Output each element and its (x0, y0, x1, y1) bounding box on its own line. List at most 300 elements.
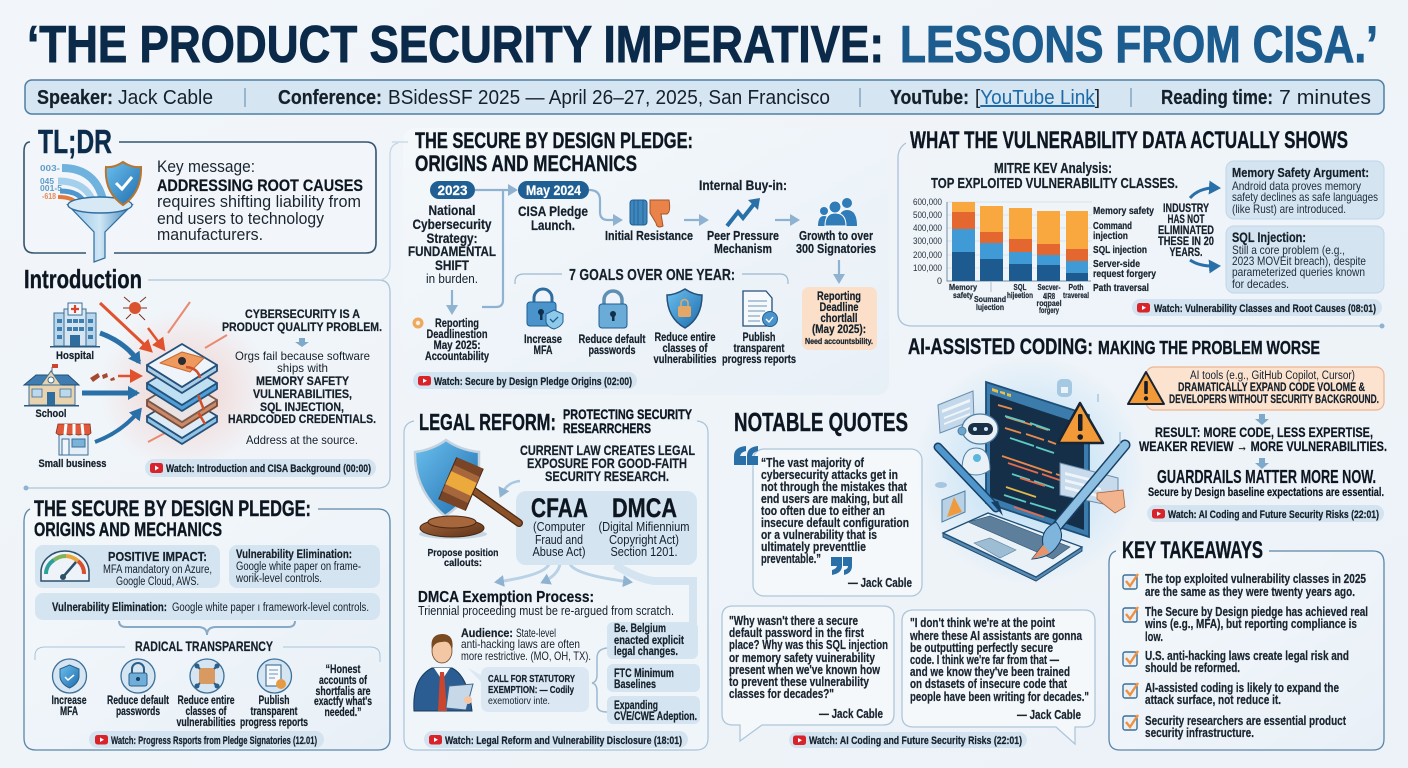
chart title: TOP EXPLOITED VULNERABILITY CLASSES. (931, 175, 1178, 192)
text: takeaway 4: attack surface, not reduce it. (1145, 693, 1281, 707)
box: FTC: Baselines (614, 677, 656, 691)
text: product quality problem: Orgs fail because software (235, 349, 370, 363)
group: radical transparency: MFA (60, 706, 78, 718)
callout: statutory exemption: EXEMPTION: — Codily (488, 684, 574, 696)
quote 3: — Jack Cable (1017, 707, 1081, 722)
panel: legal reform (404, 406, 708, 750)
box: FTC (607, 664, 700, 692)
panel: introduction (24, 143, 398, 490)
label: signatories: 300 Signatories (796, 242, 876, 256)
timeline: 2023: National (428, 203, 476, 218)
lock badge (1057, 379, 1072, 397)
icon: open quote (734, 446, 758, 465)
watch link: AI coding quotes: Watch: AI Coding and Future Security Risks (22:01) (809, 735, 1022, 747)
text: product quality problem: CYBERSECURITY IS A (245, 307, 360, 321)
bar: path traversal (1066, 211, 1088, 281)
timeline: May 2024: Launch. (531, 217, 575, 233)
stacked bar chart: safety (953, 290, 973, 300)
timeline: 2023: Cybersecurity (412, 217, 492, 232)
box: memory safety argument (1226, 161, 1384, 219)
icon: signatories (818, 198, 857, 226)
heading: pledge origins: ORIGINS AND MECHANICS (415, 151, 637, 176)
stacked bar chart: Poth (1068, 282, 1084, 292)
quote 1 (734, 446, 922, 596)
group: radical transparency: Publish (258, 695, 290, 707)
text: current law: EXPOSURE FOR GOOD-FAITH (527, 455, 687, 471)
group: seven goals (515, 267, 796, 366)
timeline: reporting deadline: Deadlinestion (426, 329, 488, 341)
text: product quality problem: MEMORY SAFETY (256, 374, 349, 388)
timeline connectors (452, 190, 839, 312)
box: positive impact: MFA mandatory on Azure, (103, 564, 212, 576)
heading: legal reform: RESEARRCHERS (563, 420, 651, 436)
watch link: introduction (145, 459, 376, 477)
watch link: progress reports: Watch: Progress Rsports from Pledge Signatories (12.01) (111, 735, 317, 747)
icon: shield with lock (667, 289, 702, 328)
info bar: Jack Cable (118, 87, 213, 109)
box: CFAA and DMCA: (Digital Mifiennium (598, 519, 690, 534)
text: result (1139, 424, 1387, 454)
chart legend: injection (1093, 230, 1128, 242)
callout: statutory exemption: exemotiorv inte. (488, 695, 550, 707)
heading: AI-assisted coding (908, 334, 1320, 359)
illustration: laptop with AI robot and warning (915, 355, 1145, 585)
group: seven goals: Reduce default (578, 334, 646, 346)
icon: software layers (147, 344, 217, 444)
quote 3: people have been writing for decades." (910, 689, 1089, 704)
text: takeaway 5: Security researchers are essential product (1145, 714, 1347, 728)
stacked bar chart: 300,000 (913, 236, 942, 247)
text: takeaway 3: U.S. anti-hacking laws create legal risk and (1145, 649, 1349, 663)
box: Belgium (607, 621, 698, 659)
quote 1: or a vulnerability that is (761, 527, 877, 542)
stacked bar chart: Secver- (1038, 282, 1061, 292)
quote 2: present when we've known how (729, 662, 881, 677)
timeline: 2023: Strategy: (426, 231, 478, 246)
chart legend: SQL injection (1093, 244, 1147, 256)
icon: code funnel and shield: 001-5 (40, 184, 63, 193)
quote 1: “The vast majority of (761, 455, 865, 470)
panel: pledge impact (24, 496, 390, 750)
text: product quality problem: HARDCODED CREDENTIALS. (228, 412, 376, 426)
callout: AI tools warning (1128, 367, 1384, 410)
timeline: reporting deadline: May 2025: (434, 340, 480, 352)
info bar: BSidesSF 2025 — April 26–27, 2025, San Francisco (388, 87, 830, 109)
stacked bar chart: forgery (1039, 305, 1059, 315)
stacked bar chart: 600,000 (913, 197, 942, 208)
text: takeaway 4 (1145, 681, 1339, 707)
heading: legal reform: PROTECTING SECURITY (563, 406, 693, 422)
quote 3: "I don't think we're at the point (910, 615, 1056, 630)
text: takeaway 3: should be reformed. (1145, 661, 1240, 675)
icon: down arrow (1255, 458, 1269, 469)
watch link: vulnerability classes (1132, 299, 1382, 316)
box: Belgium: enacted explicit (614, 633, 684, 647)
text: takeaway 5 (1145, 714, 1347, 740)
group: radical transparency: RADICAL TRANSPARENCY (135, 638, 273, 654)
text: product quality problem: ships with (277, 361, 328, 375)
timeline: May 2024 (518, 181, 589, 233)
text: product quality problem: PRODUCT QUALITY PROBLEM. (222, 320, 382, 334)
quote 2: or memory safety vuinerability (729, 650, 876, 665)
group: radical transparency: passwords (116, 706, 160, 718)
callout: statutory exemption: CALL FOR STATUTORY (488, 673, 575, 685)
stacked bar chart: 500,000 (913, 210, 942, 221)
group: seven goals: Publish (742, 332, 776, 344)
checkbox: takeaway 4 (1123, 683, 1138, 698)
timeline: May 2024: May 2024 (526, 182, 581, 198)
box: SQL injection: Still a core problem (e.g., (1232, 243, 1345, 257)
timeline: 2023: 2023 (438, 182, 468, 198)
text: audience: anti-hacking laws are often (461, 637, 580, 651)
box: CVE/CWE: CVE/CWE Adeption. (614, 709, 697, 723)
label: peer pressure: Mechanism (714, 242, 772, 256)
checkbox: takeaway 5 (1123, 715, 1138, 730)
text: product quality problem: SQL INJECTION, (260, 400, 344, 414)
card right with hand (1060, 463, 1118, 507)
label: school: School (36, 408, 66, 420)
timeline: 2023 (408, 181, 496, 286)
text: key message: Key message: (157, 157, 255, 176)
stacked bar chart: lujection (976, 302, 1004, 312)
info bar: Conference: (278, 87, 382, 109)
text: current law: CURRENT LAW CREATES LEGAL (520, 442, 695, 458)
stacked bar chart (913, 197, 1156, 315)
box: vulnerability elimination: Google white paper on frame- (236, 561, 361, 573)
text: current law: SECURITY RESEARCH. (545, 468, 669, 484)
panel: notable quotes (722, 407, 1095, 748)
text: takeaway 1: are the same as they were twenty years ago. (1145, 585, 1355, 599)
callout: reporting shortfall: Need accountsbility. (805, 336, 873, 346)
group: radical transparency: shortfalis are (316, 686, 370, 698)
callout: industry has not eliminated: THESE IN 20 (1158, 234, 1214, 248)
quote 3: where these AI assistants are gonna (909, 628, 1083, 643)
group: radical transparency: Reduce default (107, 695, 169, 707)
watch link: progress reports (89, 731, 324, 748)
watch link: AI coding (1147, 505, 1384, 522)
box: vulnerability elimination (229, 545, 380, 588)
watch link: pledge origins: Watch: Secure by Design Pledge Origins (02:00) (434, 376, 632, 388)
box: FTC: FTC Minimum (614, 666, 674, 680)
chart title (931, 160, 1178, 192)
group: radical transparency: progress reports (240, 717, 308, 729)
text: takeaway 2: low. (1145, 630, 1163, 644)
box: memory safety argument: safety declines as safe languages (1232, 190, 1378, 204)
watch link: legal reform: Watch: Legal Reform and Vulnerability Disclosure (18:01) (445, 735, 682, 747)
group: radical transparency: vulnerabilities (176, 717, 236, 729)
text: takeaway 2: wins (e.g., MFA), but reporting compliance is (1144, 617, 1357, 631)
chart legend: Memory safety (1093, 205, 1154, 217)
quote 1: — Jack Cable (848, 575, 912, 590)
group: seven goals: Increase (524, 334, 562, 346)
box: CVE/CWE (607, 696, 700, 724)
icon: report document (743, 291, 778, 326)
stacked bar chart: roqpael (1036, 298, 1062, 308)
chart legend: Command (1093, 220, 1132, 232)
timeline: reporting deadline: Accountability (425, 351, 489, 363)
icon: increase MFA (52, 659, 86, 693)
group: seven goals: MFA (534, 345, 552, 357)
group: seven goals: transparent (734, 343, 785, 355)
caption: propose position: Propose position (428, 547, 498, 559)
text: DMCA exemption (418, 589, 674, 618)
icon: small business (56, 424, 91, 455)
timeline: reporting deadline: Reporting (435, 318, 479, 330)
stacked bar chart: 4IR8 (1043, 291, 1055, 301)
quote 1: ultimately preventtlie (761, 539, 866, 554)
info bar: [YouTube Link] (975, 87, 1100, 109)
bar: memory safety (952, 202, 975, 281)
panel: pledge origins (392, 128, 889, 395)
stacked bar chart: 200,000 (913, 250, 942, 261)
heading: legal reform: LEGAL REFORM: (419, 409, 556, 435)
callout: statutory exemption (468, 667, 589, 712)
heading: AI-assisted coding: MAKING THE PROBLEM WORSE (1098, 338, 1320, 358)
watch link: introduction: Watch: Introduction and CISA Background (00:00) (166, 463, 371, 475)
icon: code funnel and shield (40, 162, 141, 262)
callout: reporting shortfall: (May 2025): (812, 324, 866, 336)
heading: pledge: ORIGINS AND MECHANICS (34, 520, 222, 541)
quote 1: too often due to either an (761, 503, 885, 518)
icon: code funnel and shield: -618 (42, 192, 56, 201)
bar: server-side request forgery (1037, 211, 1060, 281)
text: key message: end users to technology (157, 209, 324, 228)
callout: reporting shortfall (802, 287, 877, 350)
quote 3 (902, 610, 1095, 744)
text: current law (520, 442, 695, 484)
label: signatories: Growth to over (799, 229, 873, 243)
box: memory safety argument: Memory Safety Argument: (1232, 165, 1369, 180)
group: seven goals: vulnerabilities (654, 354, 716, 366)
box: CFAA and DMCA: CFAA (531, 493, 588, 523)
heading: pledge (34, 496, 311, 541)
quote 3: on dstasets of insecure code that (910, 676, 1068, 691)
stacked bar chart: SQL (1014, 282, 1026, 292)
icon: reduce default passwords (121, 659, 155, 693)
callout: industry has not eliminated: HAS NOT (1168, 212, 1205, 226)
text: key message: manufacturers. (157, 225, 263, 244)
quote 2: default password in the first (729, 625, 865, 640)
box: CFAA and DMCA (516, 491, 697, 565)
text: audience: more restrictive. (MO, OH, TX). (461, 649, 591, 663)
timeline: reporting deadline (412, 318, 489, 363)
icon: padlock (599, 291, 627, 328)
robot (962, 448, 990, 475)
box: memory safety argument: Android data proves memory (1232, 179, 1361, 193)
timeline: 2023: SHIFT (435, 258, 470, 273)
text: guardrails (1148, 467, 1384, 499)
quote 2: to prevent these vulnerability (729, 674, 870, 689)
big warning (1058, 403, 1103, 443)
panel: key takeaways (1109, 537, 1384, 750)
quote 1: cybersecurity attacks get in (761, 467, 898, 482)
callout: industry has not eliminated: ELIMINATED (1158, 223, 1214, 237)
text: key message: requires shifting liability from (157, 192, 361, 211)
icon: close quote (831, 557, 852, 575)
watch link: legal reform (424, 731, 688, 748)
box: vulnerability elimination wide: Vulnerability Elimination: (52, 600, 167, 614)
box: SQL injection: parameterized queries known (1232, 265, 1365, 279)
box: Belgium: legal changes. (614, 644, 678, 658)
group: seven goals: Reduce entire (654, 332, 716, 344)
box: vulnerability elimination: Vulnerability Elimination: (236, 547, 352, 561)
icon: code funnel and shield: 045 (40, 177, 55, 186)
heading: internal buy-in: Internal Buy-in: (699, 177, 787, 193)
screen (986, 382, 1089, 537)
arrows: to arguments (1190, 188, 1218, 266)
group: seven goals: progress reports (722, 354, 796, 366)
caption: propose position (428, 547, 498, 569)
quote 2 (722, 606, 894, 741)
quote 2: place? Why was this SQL injection (729, 637, 888, 652)
box: positive impact (35, 545, 220, 588)
box: SQL injection: SQL Injection: (1232, 230, 1306, 245)
bar: command injection (980, 206, 1003, 281)
callout: reporting shortfall: Deadline (820, 302, 858, 314)
stacked bar chart: hijeetion (1007, 290, 1033, 300)
callout: industry has not eliminated (1158, 201, 1214, 259)
icon: initial resistance (630, 200, 670, 227)
box: CFAA and DMCA: (Computer (533, 519, 586, 534)
text: DMCA exemption: DMCA Exemption Process: (418, 589, 594, 606)
checkbox: takeaway 1 (1123, 574, 1138, 589)
info bar (25, 80, 1384, 114)
connectors: statutes to items (497, 564, 693, 655)
box: CFAA and DMCA: Fraud and (535, 532, 583, 547)
chart legend: Path traversal (1093, 282, 1149, 294)
label: signatories (796, 229, 876, 256)
callout: reporting shortfall: chortlall (820, 313, 858, 325)
box: CFAA and DMCA: Section 1201. (610, 544, 678, 559)
box: positive impact: Google Cloud, AWS. (116, 576, 199, 588)
stacked bar chart: 400,000 (913, 223, 942, 234)
icon: reduce vulnerability classes (190, 659, 224, 693)
stacked bar chart: travereal (1063, 290, 1089, 300)
icon: code funnel and shield: 003- (40, 164, 60, 173)
icon: gavel and shield (415, 440, 519, 539)
group: radical transparency: transparent (250, 706, 298, 718)
text: takeaway 3 (1145, 649, 1349, 675)
quote 2: "Why wasn't there a secure (729, 613, 858, 628)
group: radical transparency: exactfy what's (314, 696, 372, 708)
text: key message: ADDRESSING ROOT CAUSES (157, 176, 363, 195)
info bar: Reading time: (1161, 87, 1273, 109)
label: peer pressure: Peer Pressure (707, 229, 779, 243)
box: positive impact: POSITIVE IMPACT: (108, 549, 207, 564)
text: audience (461, 626, 591, 663)
icon: presenter (414, 634, 473, 711)
box: CFAA and DMCA: Copyright Act) (609, 532, 679, 547)
box: vulnerability elimination wide: Google white paper ı framework-level controls. (172, 602, 369, 614)
text: key message (157, 157, 363, 244)
heading: Introduction: Introduction (24, 264, 142, 294)
text: DMCA exemption: Triennial proceeding must be re-argued from scratch. (418, 603, 674, 618)
text: takeaway 4: AI-assisted coding is likely to expand the (1145, 681, 1339, 695)
checkbox: takeaway 2 (1123, 607, 1138, 622)
watch link: AI coding quotes (789, 732, 1027, 748)
chart legend: request forgery (1093, 268, 1156, 280)
text: takeaway 5: security infrastructure. (1145, 726, 1254, 740)
laptop base (943, 533, 1082, 581)
text: audience: Audience: (461, 626, 513, 640)
quote 1: not through the mistakes that (761, 479, 908, 494)
group: seven goals: passwords (588, 345, 636, 357)
quote 3: and we know they've been trained (910, 664, 1070, 679)
label: hospital: Hospital (56, 350, 94, 362)
panel: vulnerability data (898, 127, 1384, 328)
box: vulnerability elimination wide (35, 593, 380, 620)
heading: AI-assisted coding: AI-ASSISTED CODING: (908, 334, 1093, 359)
heading: TL;DR: TL;DR (38, 123, 112, 160)
checkbox: takeaway 3 (1123, 651, 1138, 666)
bar: SQL injection (1009, 208, 1032, 281)
text: product quality problem: VULNERABILITIES, (253, 387, 352, 401)
text: takeaway 2 (1144, 605, 1368, 644)
callout: AI tools warning: AI tools (e.g., GitHub Copilot, Cursor) (1190, 370, 1355, 382)
info bar: Speaker: (37, 87, 113, 109)
group: radical transparency: “Honest (326, 664, 361, 676)
group: radical transparency: needed.” (324, 707, 362, 719)
title: ‘THE PRODUCT SECURITY IMPERATIVE: (27, 16, 884, 74)
label: small business: Small business (38, 458, 106, 470)
info bar: YouTube: (890, 87, 969, 109)
icon: hospital (50, 303, 100, 348)
icon: warning triangle (1128, 372, 1164, 404)
box: SQL injection (1226, 226, 1384, 293)
heading: key takeaways: KEY TAKEAWAYS (1122, 537, 1263, 564)
chart title: MITRE KEV Analysis: (994, 160, 1112, 177)
quote 3: be outputting perfectly secure (910, 640, 1053, 655)
heading: notable quotes: NOTABLE QUOTES (734, 407, 908, 437)
stacked bar chart: Memory (949, 282, 977, 292)
icon: gauge (41, 551, 89, 581)
quote 1: end users are making, but all (761, 491, 903, 506)
callout: industry has not eliminated: INDUSTRY (1163, 201, 1209, 215)
caption: propose position: callouts: (444, 557, 482, 569)
quote 1: insecure default configuration (761, 515, 909, 530)
heading: pledge origins (415, 128, 693, 176)
stacked bar chart: Soumand (974, 294, 1006, 304)
panel: AI-assisted coding (908, 334, 1387, 585)
stacked bar chart: 100,000 (913, 263, 942, 274)
box: CVE/CWE: Expanding (614, 698, 658, 712)
group: seven goals: classes of (662, 343, 708, 355)
pen left (938, 447, 996, 508)
label: initial resistance: Initial Resistance (605, 229, 693, 243)
small warning card (942, 491, 965, 522)
icon: bug (90, 297, 147, 382)
text: product quality problem (222, 307, 382, 447)
info bar: 7 minutes (1279, 87, 1371, 109)
box: memory safety argument: (like Rust) are introduced. (1232, 202, 1346, 216)
timeline: 2023: in burden. (426, 271, 478, 286)
box: CFAA and DMCA: Abuse Act) (532, 544, 586, 559)
group: seven goals: 7 GOALS OVER ONE YEAR: (569, 267, 735, 284)
stacked bar chart: 0 (937, 276, 942, 287)
timeline: May 2024: CISA Pledge (518, 203, 588, 219)
icon: peer pressure (727, 198, 760, 226)
group: radical transparency: accounts of (319, 675, 367, 687)
icon: down arrow (1255, 414, 1269, 425)
heading: pledge: THE SECURE BY DESIGN PLEDGE: (34, 496, 311, 521)
group: radical transparency: classes of (186, 706, 227, 718)
quote 2: — Jack Cable (819, 706, 883, 721)
icon: lock with shield (527, 289, 563, 329)
callout: reporting shortfall: Reporting (817, 291, 861, 303)
callout: industry has not eliminated: YEARS. (1170, 245, 1202, 259)
text: audience: State-level (516, 626, 556, 640)
icon: publish reports (258, 659, 292, 693)
